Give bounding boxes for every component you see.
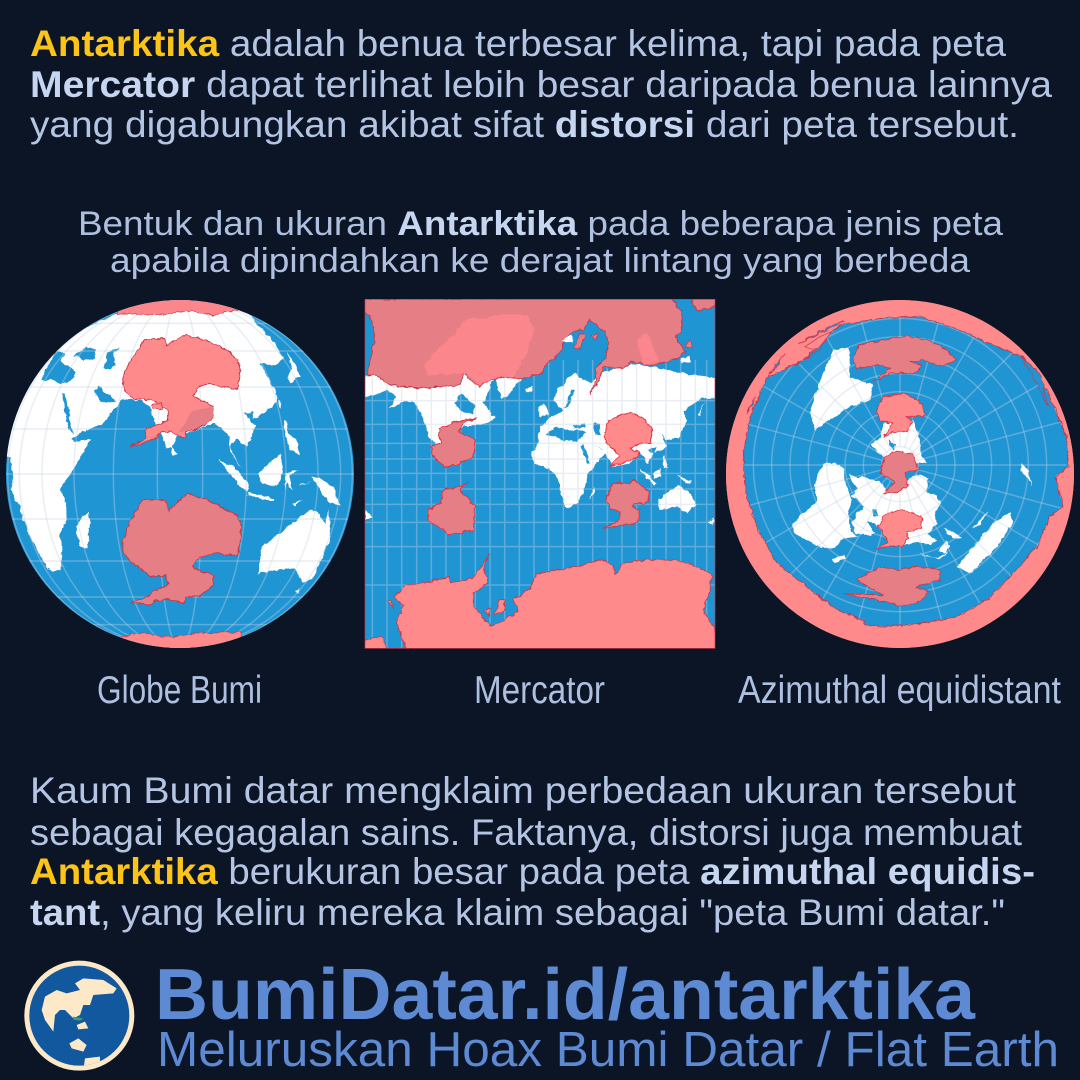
antarctica south [357, 553, 718, 655]
subtitle: apabila dipindahkan ke derajat lintang yang berbeda [110, 242, 970, 280]
subtitle: Bentuk dan ukuran Antarktika pada beberapa jenis peta [78, 205, 1003, 243]
closing paragraph: sebagai kegagalan sains. Faktanya, distorsi juga membuat [30, 812, 1023, 853]
antarctica lower [123, 494, 241, 605]
closing paragraph: Antarktika berukuran besar pada peta azimuthal equidis- [30, 851, 1035, 892]
outer ring over graticule [726, 300, 1074, 648]
antarctica upper [122, 335, 241, 447]
antarctica at central america [432, 418, 477, 467]
intro text block: Antarktika adalah benua terbesar kelima, tapi pada peta [30, 23, 1006, 64]
antarctica fifth [842, 567, 940, 607]
tagline: Meluruskan Hoax Bumi Datar / Flat Earth [157, 1023, 1059, 1077]
map labels [97, 669, 1061, 712]
closing paragraph: Kaum Bumi datar mengklaim perbedaan ukuran tersebut [30, 770, 1017, 811]
closing paragraph: tant, yang keliru mereka klaim sebagai "peta Bumi datar." [30, 892, 1005, 933]
ocean disc [743, 317, 1068, 627]
closing paragraph [30, 770, 1035, 933]
antarctica cap south [121, 630, 242, 648]
map labels: Globe Bumi [97, 669, 262, 712]
antarctica second [877, 393, 925, 437]
intro text block [30, 23, 1052, 145]
intro text block: yang digabungkan akibat sifat distorsi dari peta tersebut. [30, 104, 1019, 145]
antarctica at asia [605, 412, 653, 466]
intro text block: Mercator dapat terlihat lebih besar daripada benua lainnya [30, 64, 1052, 105]
map: mercator [357, 297, 718, 655]
map labels: Mercator [474, 669, 605, 712]
antarctica cap north [116, 300, 238, 317]
subtitle [78, 205, 1003, 280]
antarctica top [853, 336, 956, 382]
edge slivers [747, 321, 1048, 413]
icon: earth logo [24, 961, 134, 1071]
antarctica at indian ocean [603, 480, 648, 528]
site url: BumiDatar.id/antarktika [155, 955, 976, 1035]
antarctica third [881, 451, 919, 493]
antarctica at pacific [428, 482, 475, 535]
map: globe [6, 300, 354, 648]
map: azimuthal equidistant [726, 300, 1074, 648]
antarctica stretched north [357, 297, 718, 394]
antarctica fourth [877, 509, 922, 549]
